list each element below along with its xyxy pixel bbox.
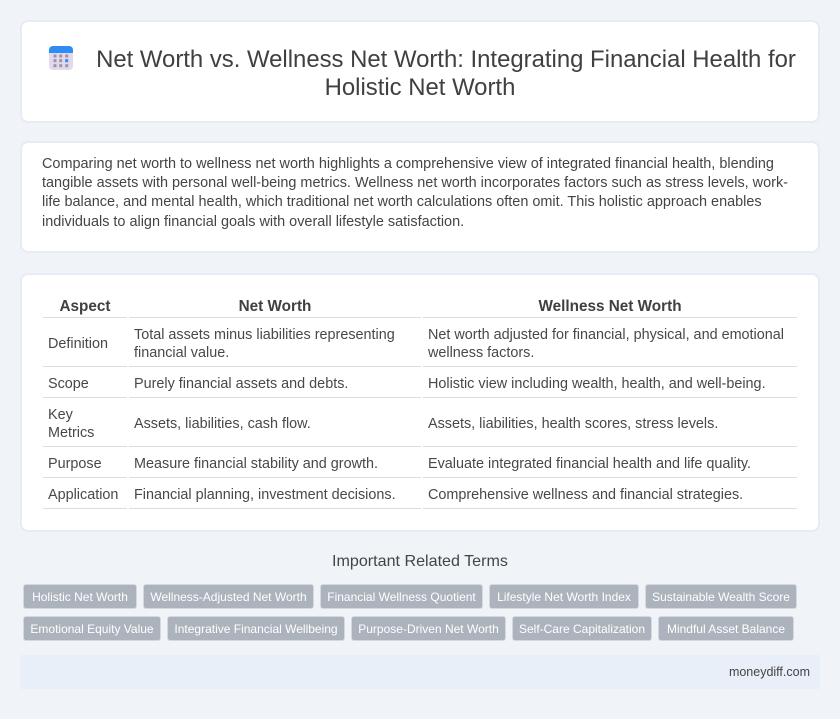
comparison table: Assets, liabilities, cash flow. bbox=[134, 416, 311, 432]
tag bbox=[512, 616, 652, 641]
related terms heading: Important Related Terms bbox=[332, 552, 508, 570]
comparison table bbox=[43, 298, 797, 509]
comparison table: Holistic view including wealth, health, and well-being. bbox=[428, 376, 766, 392]
tag: Self-Care Capitalization bbox=[519, 622, 645, 636]
tag: Mindful Asset Balance bbox=[667, 622, 785, 636]
tag: Purpose-Driven Net Worth bbox=[358, 622, 499, 636]
tag: Wellness-Adjusted Net Worth bbox=[150, 590, 307, 604]
comparison table: Total assets minus liabilities representing bbox=[134, 327, 395, 343]
row: Key Metrics: Key bbox=[48, 407, 73, 423]
comparison table: Evaluate integrated financial health and life quality. bbox=[428, 456, 751, 472]
tag: Sustainable Wealth Score bbox=[652, 590, 790, 604]
tag: Financial Wellness Quotient bbox=[327, 590, 476, 604]
row: Application: Application bbox=[48, 487, 118, 503]
header: Net Worth: Net Worth bbox=[239, 298, 311, 315]
icon: calendar bbox=[49, 46, 73, 70]
tag bbox=[645, 584, 797, 609]
tag bbox=[23, 584, 137, 609]
tag: Integrative Financial Wellbeing bbox=[174, 622, 338, 636]
row: Scope: Scope bbox=[48, 376, 89, 392]
tag bbox=[351, 616, 506, 641]
header: Wellness Net Worth: Wellness Net Worth bbox=[538, 298, 682, 315]
tag: Lifestyle Net Worth Index bbox=[497, 590, 631, 604]
row: Purpose: Purpose bbox=[48, 456, 102, 472]
tag: Holistic Net Worth bbox=[32, 590, 128, 604]
tag bbox=[658, 616, 794, 641]
related terms tags bbox=[23, 584, 797, 641]
comparison table: Assets, liabilities, health scores, stress levels. bbox=[428, 416, 718, 432]
title: Holistic Net Worth bbox=[325, 74, 515, 101]
row: Key Metrics bbox=[48, 407, 94, 441]
intro text: Comparing net worth to wellness net worth highlights a comprehensive view of integrated financial health, blending bbox=[42, 156, 774, 172]
title panel bbox=[20, 20, 820, 123]
intro text: individuals to align financial goals with overall lifestyle satisfaction. bbox=[42, 214, 464, 230]
comparison table: Purely financial assets and debts. bbox=[134, 376, 348, 392]
comparison table: Measure financial stability and growth. bbox=[134, 456, 378, 472]
title bbox=[96, 46, 796, 101]
tag: Emotional Equity Value bbox=[30, 622, 154, 636]
footer bar bbox=[20, 655, 820, 689]
tag bbox=[23, 616, 161, 641]
comparison table: financial value. bbox=[134, 345, 229, 361]
row: Definition: Definition bbox=[48, 336, 108, 352]
header: Aspect: Aspect bbox=[59, 298, 110, 315]
comparison table: Financial planning, investment decisions. bbox=[134, 487, 396, 503]
title: Net Worth vs. Wellness Net Worth: Integrating Financial Health for bbox=[96, 46, 796, 73]
intro text: life balance, and mental health, which traditional net worth calculations often omit. This holistic approach enables bbox=[42, 194, 762, 210]
table panel bbox=[20, 273, 820, 532]
intro text bbox=[42, 156, 788, 230]
tag bbox=[167, 616, 345, 641]
tag bbox=[489, 584, 639, 609]
comparison table: Comprehensive wellness and financial strategies. bbox=[428, 487, 743, 503]
intro panel bbox=[20, 141, 820, 253]
intro text: tangible assets with personal well-being metrics. Wellness net worth incorporates factors such as stress levels, work- bbox=[42, 175, 788, 191]
tag bbox=[143, 584, 314, 609]
comparison table: wellness factors. bbox=[428, 345, 534, 361]
tag bbox=[320, 584, 483, 609]
comparison table: Net worth adjusted for financial, physical, and emotional bbox=[428, 327, 784, 343]
row: Key Metrics: Metrics bbox=[48, 425, 94, 441]
footer text: moneydiff.com bbox=[729, 665, 810, 679]
